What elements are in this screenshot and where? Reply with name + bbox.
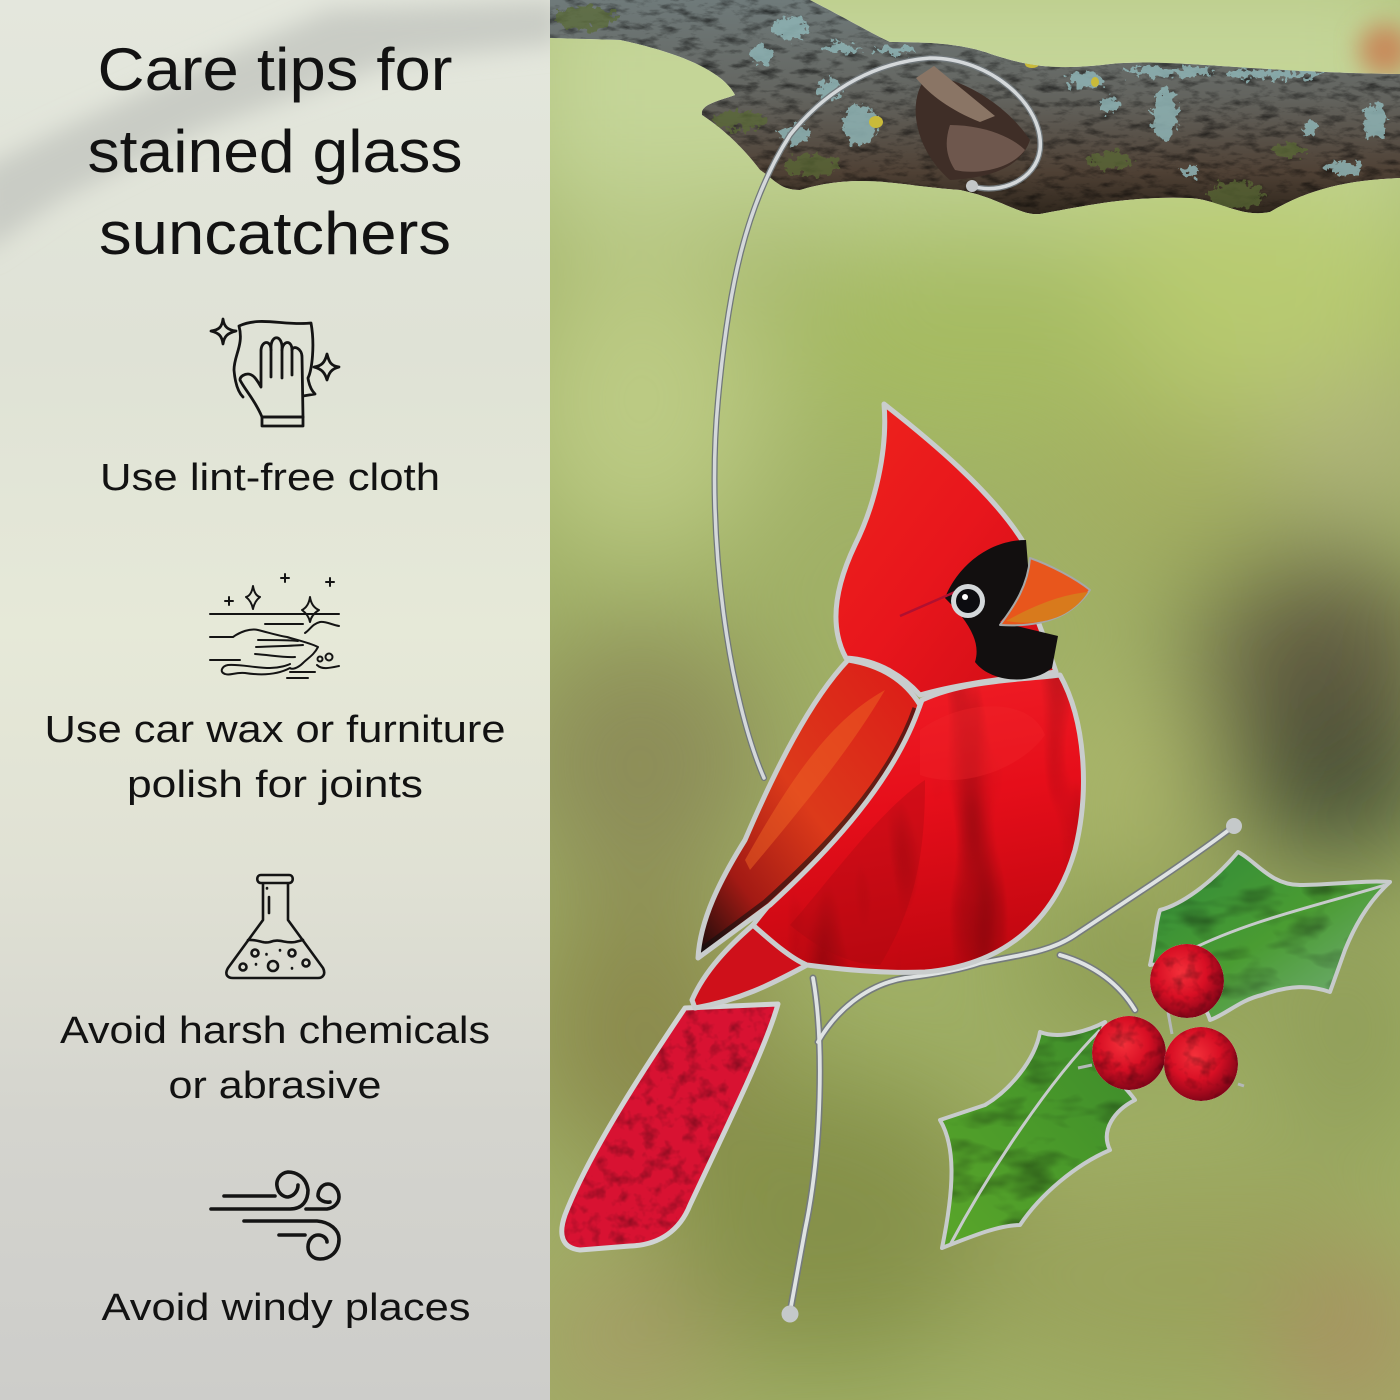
beak bbox=[1000, 558, 1090, 625]
text: car wax bbox=[44, 709, 506, 806]
icon: flask bbox=[226, 875, 324, 978]
title: suncatchers bbox=[99, 200, 451, 267]
body bbox=[753, 675, 1083, 972]
wing bbox=[698, 660, 920, 958]
tail bbox=[562, 1004, 778, 1250]
photo background: blurred foliage bbox=[500, 0, 1400, 1400]
icon: hand polishing surface bbox=[210, 574, 339, 678]
text: chemicals: or abrasive bbox=[168, 1065, 382, 1107]
holly leaf lower bbox=[940, 1022, 1135, 1248]
eye bbox=[900, 592, 955, 616]
berries bbox=[1078, 944, 1244, 1101]
lower tail covert bbox=[692, 925, 807, 1008]
text: use lint-free cloth: Use lint-free cloth bbox=[100, 457, 440, 499]
text: chemicals: Avoid harsh chemicals bbox=[60, 1010, 490, 1052]
text: car wax: polish for joints bbox=[127, 764, 423, 806]
head crest bbox=[836, 404, 1056, 695]
stems bbox=[782, 818, 1242, 1322]
title bbox=[88, 36, 462, 267]
title: stained glass bbox=[88, 118, 462, 185]
wire hook bbox=[715, 58, 1040, 778]
holly leaf upper bbox=[1150, 852, 1390, 1020]
title: Care tips for bbox=[98, 36, 452, 103]
lichen patches bbox=[555, 6, 1386, 209]
text: chemicals bbox=[60, 1010, 490, 1107]
text: car wax: Use car wax or furniture bbox=[44, 709, 506, 751]
text: windy places: Avoid windy places bbox=[102, 1287, 470, 1329]
black face mask bbox=[945, 540, 1058, 679]
icon: cloth and hand bbox=[211, 319, 339, 426]
bark knot bbox=[916, 75, 1030, 180]
branch bbox=[550, 0, 1400, 214]
cardinal stained glass bbox=[562, 404, 1090, 1250]
icon: wind bbox=[211, 1172, 339, 1259]
left panel: frosted background bbox=[0, 0, 560, 1400]
